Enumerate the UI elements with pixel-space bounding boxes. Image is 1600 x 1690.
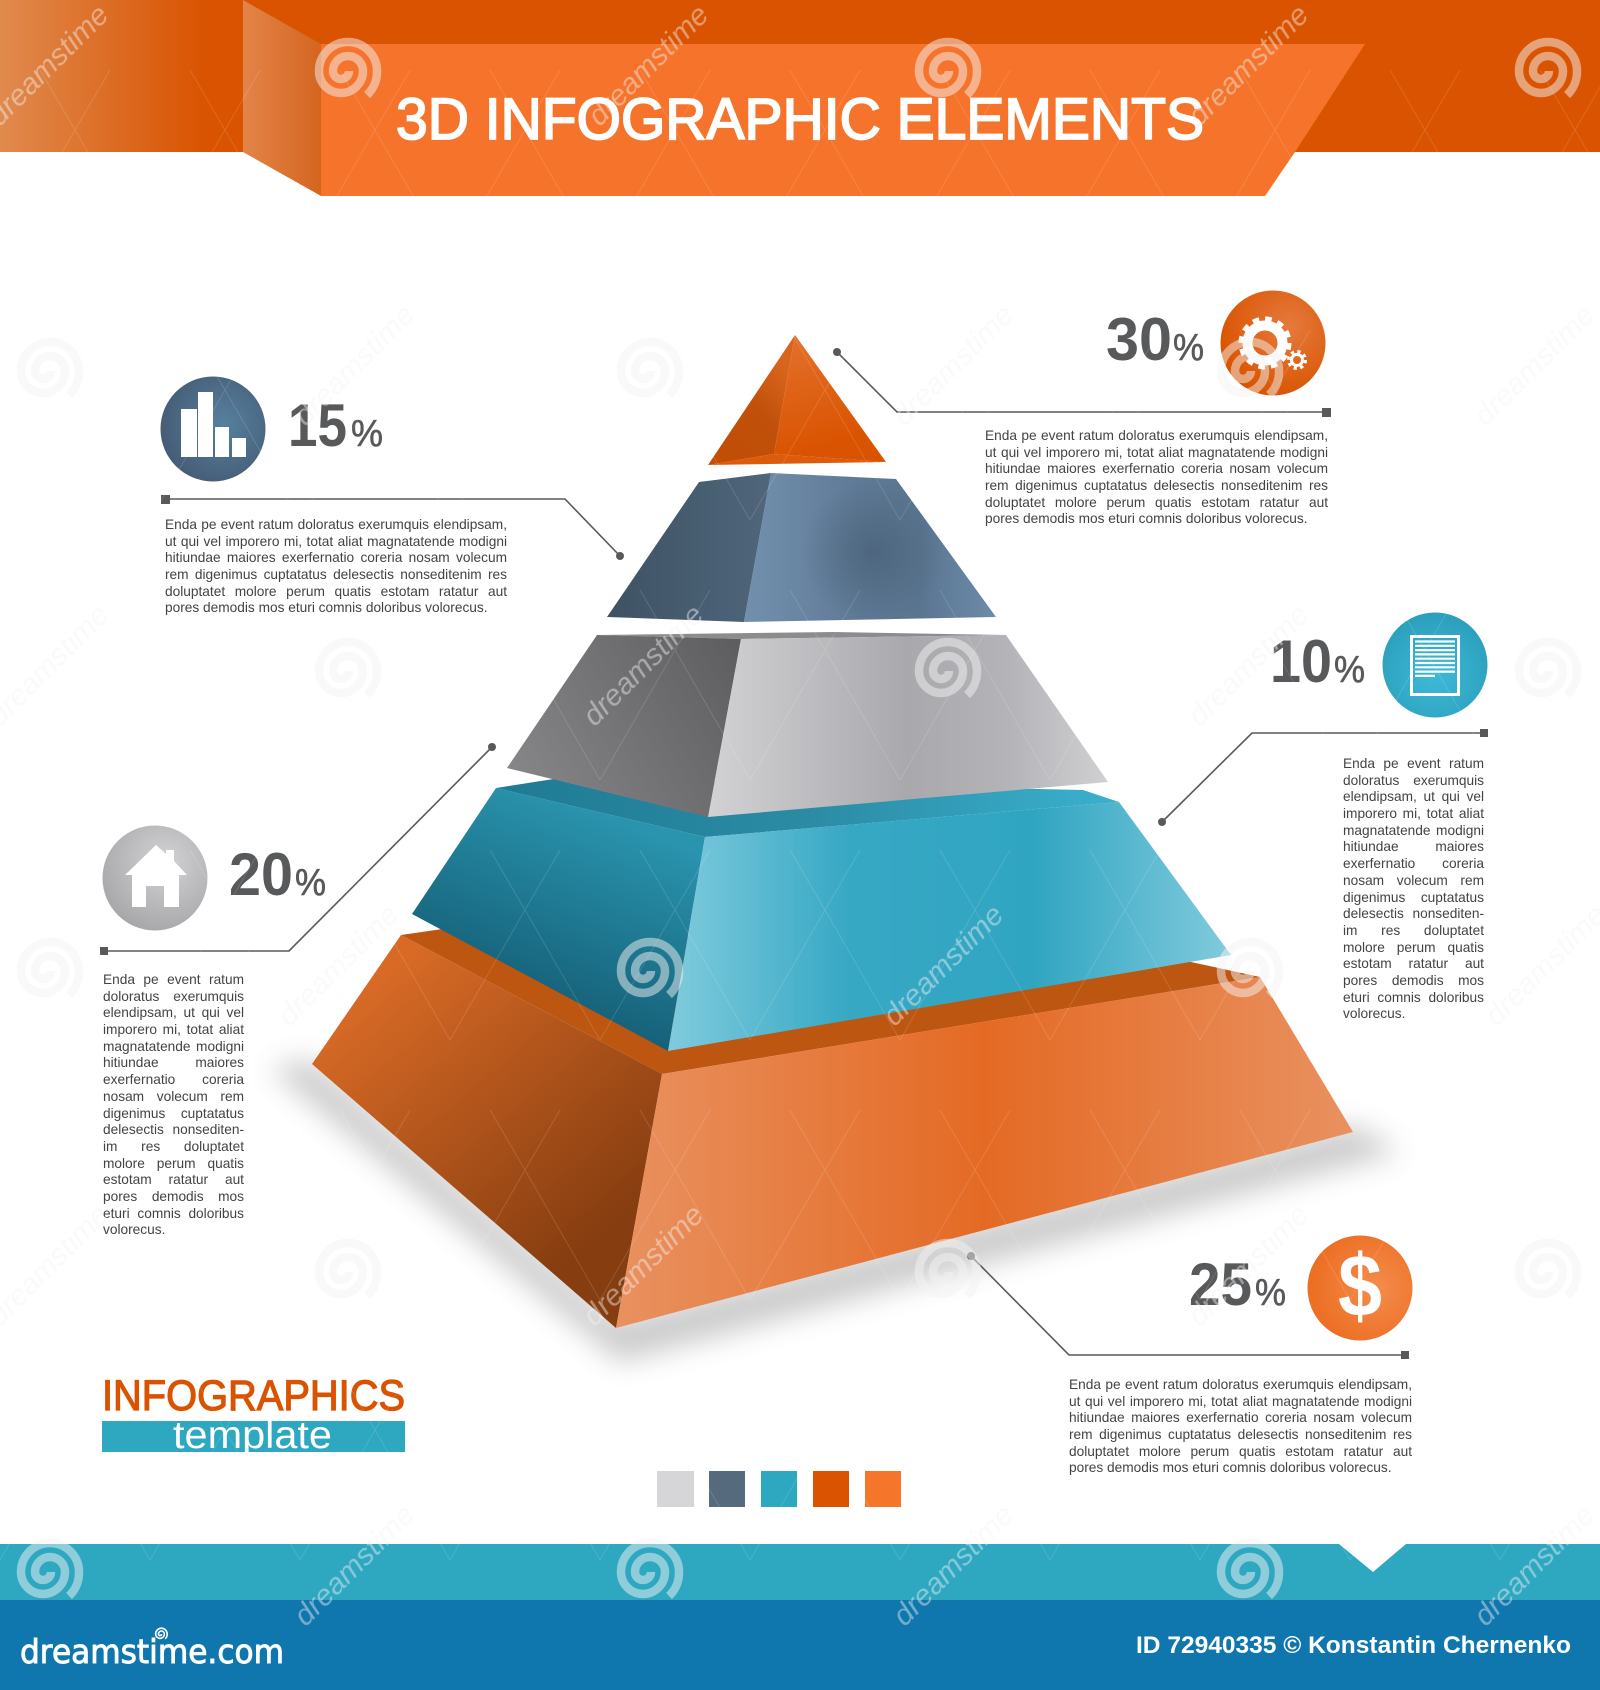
text block: 20%: elendipsam, ut qui vel — [103, 1005, 244, 1020]
text block: 10%: pores demodis mos — [1343, 973, 1484, 988]
leader line — [967, 1252, 1409, 1359]
watermark text: dreamstime — [886, 298, 1020, 432]
text block: 10%: eturi comnis doloribus — [1343, 990, 1484, 1005]
pyramid shadow — [270, 1060, 1400, 1362]
icon: bar chart — [160, 376, 266, 482]
text block: 30%: hitiundae maiores exerfernatio coreria nosam volecum — [985, 461, 1328, 476]
text block: 10%: exerfernatio coreria — [1343, 856, 1484, 871]
text block: 10%: digenimus cuptatatus — [1343, 890, 1484, 904]
text block: 15% — [165, 517, 507, 615]
icon: dollar — [1308, 1236, 1412, 1340]
text block: 10%: nosam volecum rem — [1343, 873, 1484, 888]
layer: grey — [507, 632, 1108, 817]
text block: 15%: doluptatet molore perum quatis estotam ratatur aut — [165, 584, 507, 599]
icon: house — [102, 826, 208, 930]
text block: 10%: doloratus exerumquis — [1343, 773, 1484, 788]
footer logo spiral — [156, 1628, 167, 1639]
text block: 10%: Enda pe event ratum — [1343, 756, 1484, 771]
text block: 10% — [1343, 756, 1484, 1021]
colour swatches — [657, 1471, 901, 1507]
text block: 25%: hitiundae maiores exerfernatio coreria nosam volecum — [1069, 1410, 1412, 1425]
text block: 15%: ut qui vel imporero mi, totat aliat magnatatende modigni — [165, 534, 507, 549]
title: 3D INFOGRAPHIC ELEMENTS — [396, 87, 1204, 152]
leader line — [100, 743, 496, 955]
icon: document — [1382, 612, 1488, 718]
text block: 20%: nosam volecum rem — [103, 1089, 244, 1104]
icon: gears — [1220, 290, 1326, 396]
text block: 20%: exerfernatio coreria — [103, 1072, 244, 1087]
text block: 10%: delesectis nonsediten- — [1343, 906, 1484, 921]
text block: 15%: hitiundae maiores exerfernatio coreria nosam volecum — [165, 550, 507, 565]
text block: 10%: volorecus. — [1343, 1006, 1405, 1021]
callout: 10% — [1158, 612, 1488, 826]
watermark text: dreamstime — [1181, 1198, 1315, 1332]
text block: 20%: volorecus. — [103, 1222, 165, 1237]
text block: 20%: eturi comnis doloribus — [103, 1206, 244, 1221]
text block: 10%: hitiundae maiores — [1343, 839, 1484, 854]
percentage: % — [351, 413, 383, 455]
watermark text: dreamstime — [1181, 0, 1315, 132]
text block: 20% — [103, 972, 244, 1237]
percentage: 30 — [1106, 306, 1172, 373]
percentage — [229, 841, 326, 908]
callout: 30% — [833, 290, 1331, 417]
footer bar — [0, 1600, 1600, 1690]
watermark text: dreamstime — [271, 898, 405, 1032]
bottom teal band — [0, 1544, 1600, 1600]
watermark text: dreamstime — [287, 298, 421, 432]
percentage: 10 — [1270, 628, 1332, 695]
text block: 10%: molore perum quatis — [1343, 940, 1484, 955]
watermark text: dreamstime — [1467, 1498, 1600, 1632]
text block: 10%: imporero mi, totat aliat — [1343, 806, 1484, 821]
footer credit: ID 72940335 © Konstantin Chernenko — [1136, 1632, 1571, 1659]
watermark text: dreamstime — [876, 898, 1010, 1032]
callout: 25% — [967, 1236, 1412, 1359]
text block: 30%: Enda pe event ratum doloratus exerumquis elendipsam, — [985, 428, 1328, 443]
leader line — [833, 348, 1331, 417]
text block: 25% — [1069, 1377, 1412, 1475]
pyramid chart — [270, 335, 1400, 1362]
text block: 20%: hitiundae maiores — [103, 1055, 244, 1070]
text block: 25%: Enda pe event ratum doloratus exerumquis elendipsam, — [1069, 1377, 1412, 1392]
percentage: % — [295, 862, 326, 904]
text block: 10%: estotam ratatur aut — [1343, 956, 1484, 971]
leader line — [1158, 729, 1488, 826]
watermark text: dreamstime — [1467, 298, 1600, 432]
percentage: % — [1173, 327, 1204, 369]
text block: 20%: imporero mi, totat aliat — [103, 1022, 244, 1037]
text block: 20%: im res doluptatet — [103, 1139, 244, 1154]
percentage: % — [1334, 649, 1365, 691]
text block: 20%: magnatatende modigni — [103, 1039, 244, 1054]
text block: 25%: rem digenimus cuptatatus delesectis nonseditenim res — [1069, 1427, 1412, 1442]
text block: 15%: Enda pe event ratum doloratus exerumquis elendipsam, — [165, 517, 507, 532]
logo heading: INFOGRAPHICS — [102, 1372, 405, 1420]
percentage: % — [1255, 1272, 1286, 1314]
text block: 25%: pores demodis mos eturi comnis doloribus volorecus. — [1069, 1460, 1392, 1475]
text block: 10%: magnatatende modigni — [1343, 823, 1484, 838]
text block: 20%: digenimus cuptatatus — [103, 1106, 244, 1120]
header banner — [0, 0, 1600, 196]
text block: 25%: ut qui vel imporero mi, totat aliat magnatatende modigni — [1069, 1394, 1412, 1409]
percentage: 15 — [288, 392, 347, 459]
watermark text: dreamstime — [581, 0, 715, 132]
text block: 25%: doluptatet molore perum quatis estotam ratatur aut — [1069, 1444, 1412, 1459]
text block: 20%: delesectis nonsediten- — [103, 1122, 244, 1137]
text block: 30%: ut qui vel imporero mi, totat aliat magnatatende modigni — [985, 445, 1328, 460]
callout: 15% — [160, 376, 624, 560]
callout: 20% — [100, 743, 496, 955]
text block: 15%: pores demodis mos eturi comnis doloribus volorecus. — [165, 600, 488, 615]
percentage: 25 — [1189, 1251, 1252, 1318]
text block: 30% — [985, 428, 1328, 526]
layer: base orange — [312, 925, 1353, 1328]
watermark text: dreamstime — [886, 1498, 1020, 1632]
watermark text: dreamstime — [1181, 598, 1315, 732]
infographics logo — [102, 1372, 405, 1457]
text block: 10%: im res doluptatet — [1343, 923, 1484, 938]
text block: 15%: rem digenimus cuptatatus delesectis nonseditenim res — [165, 567, 507, 582]
watermark text: dreamstime — [287, 1498, 421, 1632]
percentage: 20 — [229, 841, 293, 908]
text block: 20%: estotam ratatur aut — [103, 1172, 244, 1187]
text block: 10%: elendipsam, ut qui vel — [1343, 789, 1484, 804]
watermark text: dreamstime — [576, 598, 710, 732]
footer logo text: dreamstime.com — [20, 1632, 284, 1671]
percentage — [1189, 1251, 1286, 1318]
layer: apex orange — [708, 335, 886, 465]
text block: 20%: doloratus exerumquis — [103, 989, 244, 1004]
text block: 30%: pores demodis mos eturi comnis doloribus volorecus. — [985, 511, 1308, 526]
percentage — [1106, 306, 1204, 373]
text block: 20%: molore perum quatis — [103, 1156, 244, 1171]
layer: teal — [412, 778, 1231, 1051]
layer: slate — [607, 473, 996, 622]
text block: 30%: doluptatet molore perum quatis estotam ratatur aut — [985, 495, 1328, 510]
watermark text: dreamstime — [576, 1198, 710, 1332]
icon: dollar: $ — [1338, 1236, 1382, 1335]
logo bar — [102, 1421, 405, 1452]
leader line — [161, 495, 624, 560]
text block: 20%: pores demodis mos — [103, 1189, 244, 1204]
text block: 30%: rem digenimus cuptatatus delesectis nonseditenim res — [985, 478, 1328, 493]
logo subtitle: template — [173, 1414, 332, 1457]
text block: 20%: Enda pe event ratum — [103, 972, 244, 987]
